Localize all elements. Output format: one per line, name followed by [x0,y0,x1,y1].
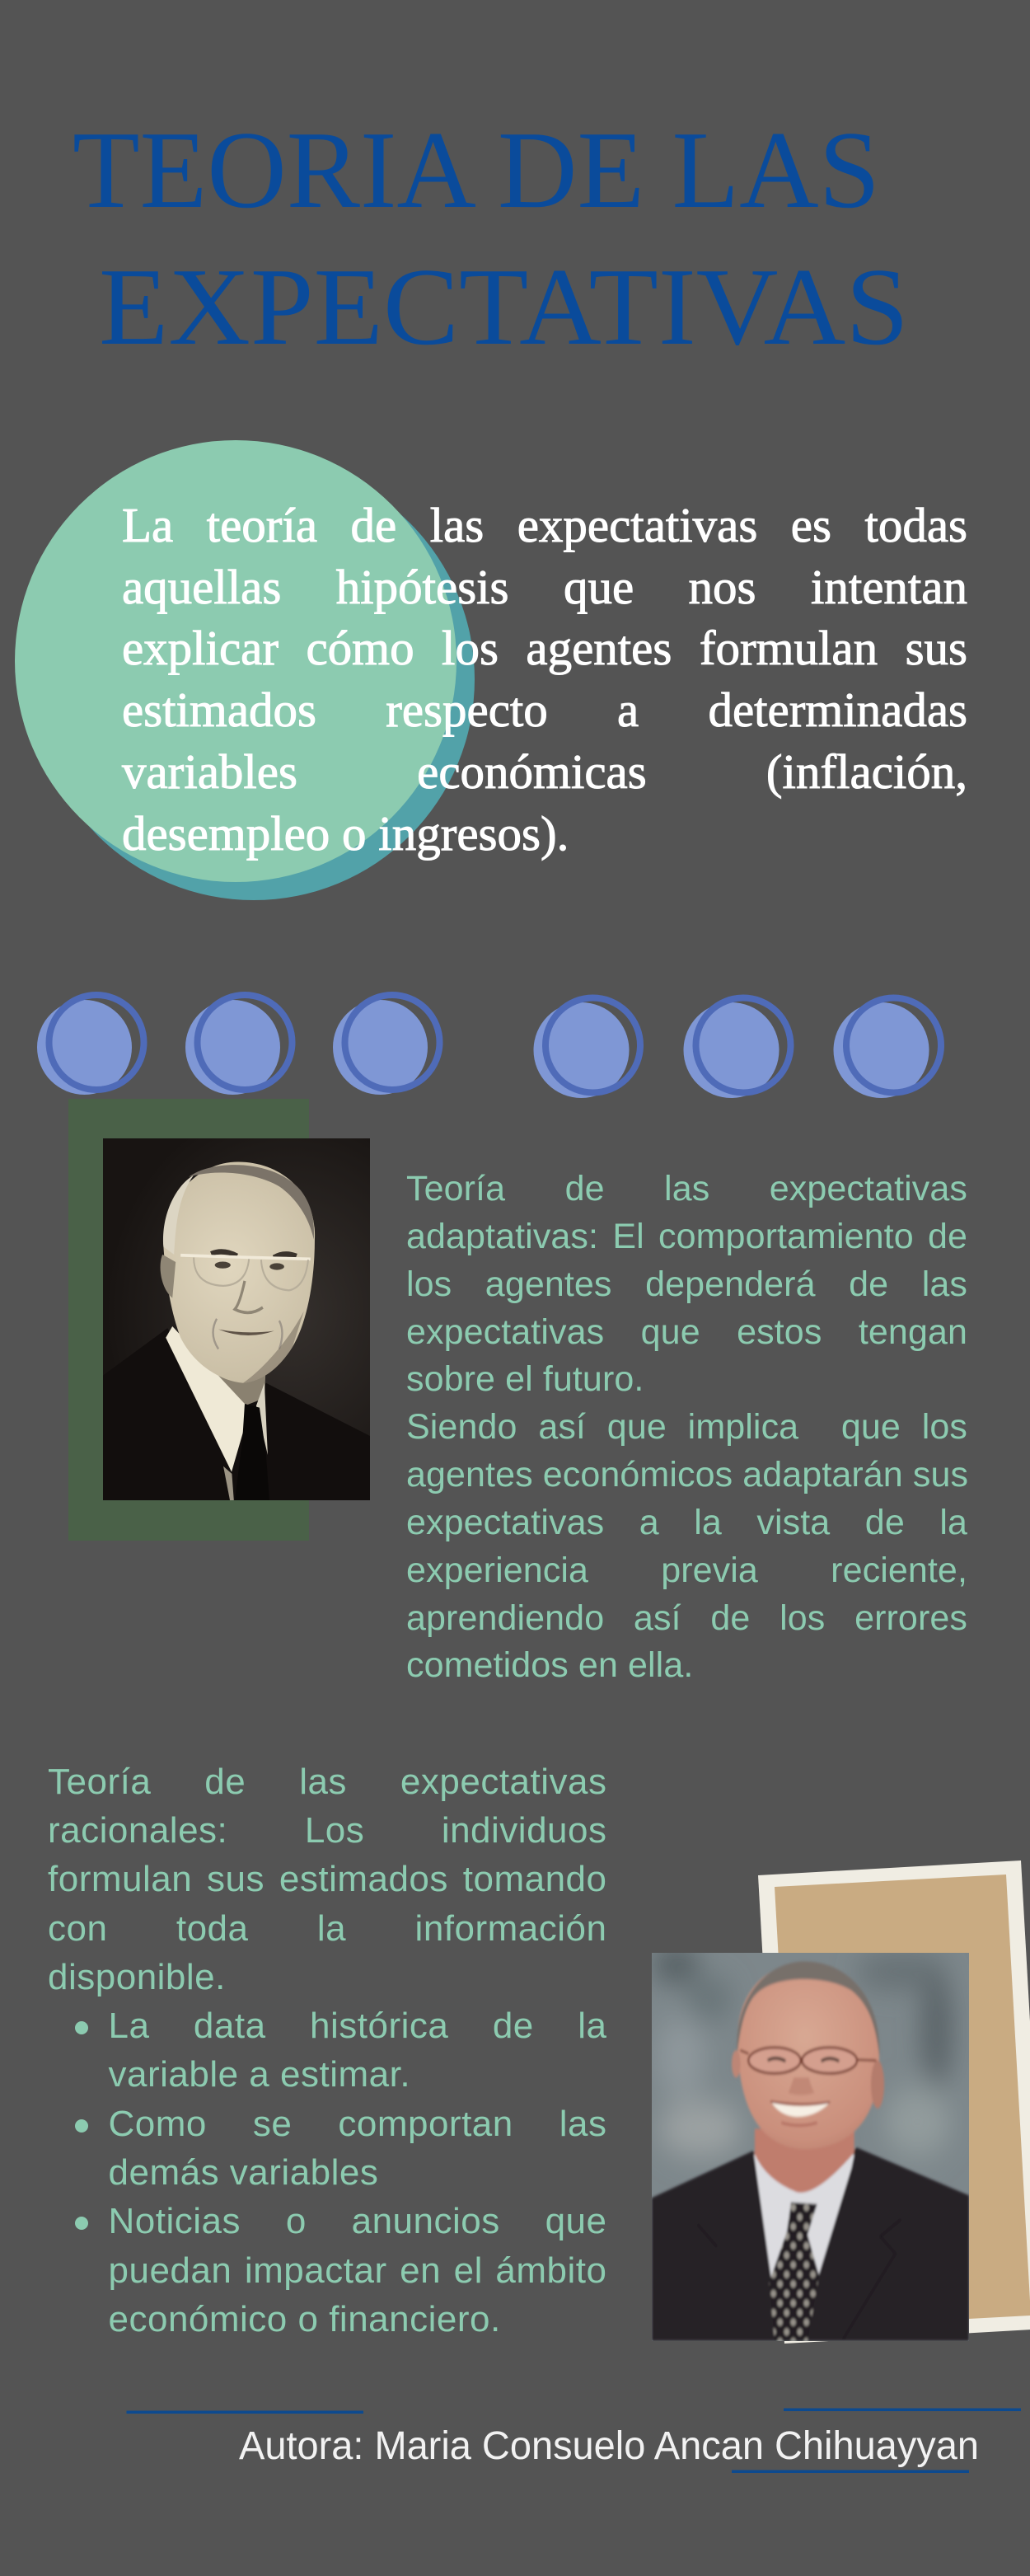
text block: rational expectations with bullet list: La data histórica de la [109,2006,606,2046]
decorative line left [127,2410,363,2414]
text block: adaptive expectations: cometidos en ella. [406,1645,693,1685]
bubble 3 [333,995,440,1095]
bubble 6 [834,997,941,1098]
bubble 4 [534,997,640,1098]
intro text block: La teoría de las expectativas es todas [122,498,967,552]
tilted cream card [758,1860,1030,2344]
intro text block: estimados respecto a determinadas [122,683,967,737]
text block: adaptive expectations: los agentes dependerá de las [406,1265,967,1304]
portrait: black and white photo of an older man with glasses [103,1138,370,1500]
text block: adaptive expectations: sobre el futuro. [406,1359,644,1399]
text block: adaptive expectations [406,1169,968,1685]
decorative line right [784,2409,1021,2411]
title line 2: EXPECTATIVAS [99,246,909,368]
text block: rational expectations with bullet list: demás variables [109,2152,378,2193]
tan inner panel [775,1875,1030,2328]
author credit: Autora: Maria Consuelo Ancan Chihuayyan [239,2424,979,2468]
bubble 5 [684,997,791,1098]
intro text block: aquellas hipótesis que nos intentan [122,560,967,614]
text block: rational expectations with bullet list: variable a estimar. [109,2054,410,2095]
decorative bubbles row [37,995,941,1098]
text block: rational expectations with bullet list: formulan sus estimados tomando [48,1859,606,1899]
text block: rational expectations with bullet list: puedan impactar en el ámbito [109,2250,606,2291]
green circle [15,440,456,882]
decorative line under author [732,2470,969,2473]
teal circle [33,458,475,900]
title line 1: TEORIA DE LAS [73,109,880,231]
text block: rational expectations with bullet list: Teoría de las expectativas [48,1762,606,1802]
text block: adaptive expectations: expectativas que estos tengan [406,1312,967,1352]
text block: adaptive expectations: experiencia previa reciente, [406,1551,967,1590]
text block: rational expectations with bullet list: disponible. [48,1957,226,1997]
bubble 2 [185,995,292,1095]
intro text block [122,498,967,861]
intro circles [15,440,475,900]
text block: adaptive expectations: agentes económicos adaptarán sus [406,1455,968,1494]
intro text block: variables económicas (inflación, [122,744,967,799]
text block: adaptive expectations: aprendiendo así de los errores [406,1598,967,1638]
text block: adaptive expectations: expectativas a la vista de la [406,1503,967,1542]
portrait: colour photo of a smiling man in suit and glasses [652,1953,969,2341]
text block: rational expectations with bullet list [48,1762,606,2339]
text block: rational expectations with bullet list: Noticias o anuncios que [109,2201,606,2241]
text block: rational expectations with bullet list: Como se comportan las [109,2104,606,2144]
intro text block: desempleo o ingresos). [122,806,569,861]
text block: rational expectations with bullet list: con toda la información [48,1908,606,1949]
title [73,109,909,368]
green backing panel [68,1099,309,1541]
text block: rational expectations with bullet list: racionales: Los individuos [48,1810,606,1851]
bubble 1 [37,995,143,1095]
text block: rational expectations with bullet list: económico o financiero. [109,2299,501,2339]
intro text block: explicar cómo los agentes formulan sus [122,621,967,675]
text block: adaptive expectations: Siendo así que implica que los [406,1407,967,1447]
text block: adaptive expectations: Teoría de las expectativas [406,1169,967,1208]
text block: adaptive expectations: adaptativas: El comportamiento de [406,1217,967,1256]
